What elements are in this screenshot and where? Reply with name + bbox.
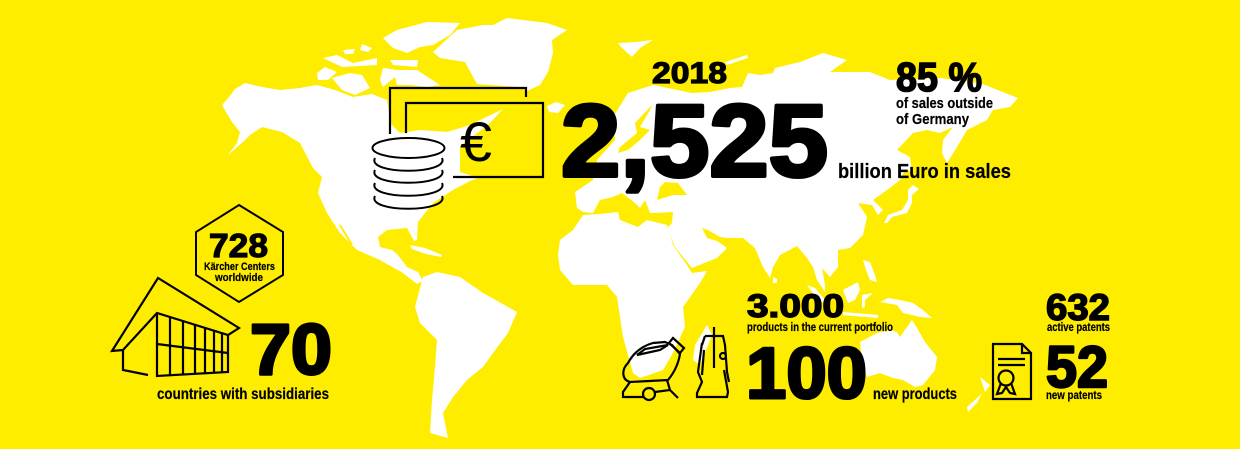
active patents label: active patents (1047, 322, 1110, 334)
map: South America (415, 272, 517, 438)
map: Cuba and Caribbean (410, 245, 442, 257)
map: New Guinea (880, 298, 932, 318)
map: Africa (558, 212, 707, 378)
map: Eurasia (575, 53, 1018, 292)
new patents label: new patents (1046, 390, 1102, 402)
sales label: billion Euro in sales (838, 161, 1011, 183)
new products label: new products (873, 386, 957, 403)
front banknote (406, 103, 543, 177)
share label: of Germany (896, 111, 970, 128)
map: Japan (884, 185, 919, 223)
map: Iceland, Svalbard and Novaya Zemlya (547, 40, 748, 113)
coin halo (369, 133, 447, 211)
map: Sri Lanka (773, 277, 777, 283)
share label: of sales outside (896, 95, 993, 112)
map: Baja California gulf (340, 225, 352, 245)
hexagon: Kärcher Centers: worldwide (214, 272, 263, 284)
icon: building (112, 278, 239, 376)
new products figure 100: 100 (746, 334, 867, 414)
map: Madagascar (693, 325, 712, 365)
sales figure 2,525: 2,525 (561, 84, 828, 198)
active patents figure 632: 632 (1046, 287, 1110, 328)
new patents figure 52: 52 (1046, 335, 1108, 400)
map: Southeast Asia islands (807, 260, 878, 318)
icon: spray bottle (697, 327, 729, 397)
map: Greenland (433, 18, 567, 91)
portfolio label: products in the current portfolio (747, 322, 893, 334)
year 2018: 2018 (652, 57, 727, 90)
hexagon: Kärcher Centers: 728 (209, 227, 268, 264)
subsidiaries figure 70: 70 (250, 311, 332, 390)
icon: banknotes and coins (369, 88, 543, 211)
portfolio figure 3.000: 3.000 (747, 288, 844, 324)
back banknote (390, 88, 526, 134)
coin stack (372, 138, 444, 209)
subsidiaries label: countries with subsidiaries (157, 386, 329, 403)
icon: floor scrubber (623, 338, 684, 400)
hexagon: Kärcher Centers: Kärcher Centers (204, 261, 275, 273)
share 85 percent: 85 % (896, 54, 982, 100)
hexagon: Kärcher Centers (196, 205, 283, 302)
map: North America (222, 83, 503, 284)
map: Arctic islands (317, 22, 460, 95)
map: New Zealand (967, 377, 990, 412)
world map (222, 18, 1018, 438)
icon: patent certificate (992, 344, 1031, 399)
map: Australia (860, 320, 937, 387)
euro sign: € (460, 110, 492, 173)
share label (896, 95, 993, 128)
